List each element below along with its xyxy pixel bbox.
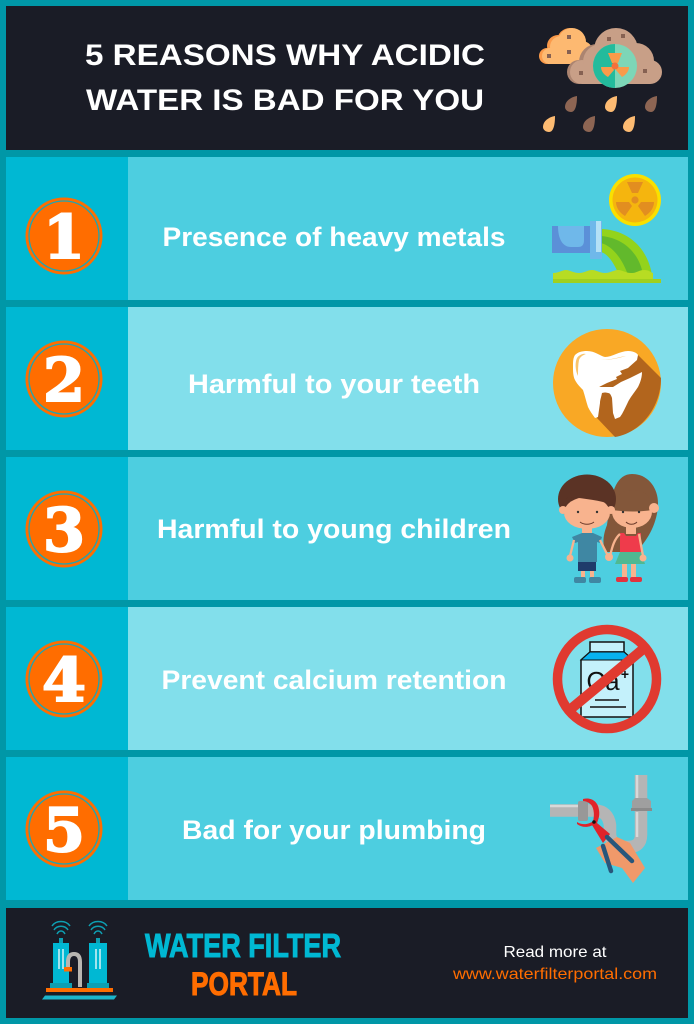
panel: footer xyxy=(6,908,688,1018)
icon: wrench on pipe xyxy=(550,775,652,883)
panel: reason 3 xyxy=(6,457,688,600)
read more text xyxy=(452,944,657,983)
number badge 2 xyxy=(26,340,102,418)
title: WATER IS BAD FOR YOU xyxy=(86,84,484,117)
number badge 1: 1 xyxy=(43,203,85,273)
number badge 3: 3 xyxy=(43,496,85,566)
read more text: Read more at xyxy=(504,944,607,961)
number badge 5 xyxy=(26,790,102,868)
panel: reason 4 xyxy=(6,607,688,750)
read more text: www.waterfilterportal.com xyxy=(452,966,657,983)
logo wordmark: PORTAL xyxy=(191,966,297,1002)
number badge 3 xyxy=(26,490,102,568)
title: 5 REASONS WHY ACIDIC xyxy=(85,39,485,72)
number badge 5: 5 xyxy=(43,796,85,866)
label 4: Prevent calcium retention xyxy=(162,665,506,695)
icon: no calcium prohibition sign: Ca xyxy=(586,666,620,696)
logo icon: water filter tanks xyxy=(42,922,117,1000)
panel: reason 5 xyxy=(6,757,688,900)
title xyxy=(85,39,485,117)
panel: reason 2 xyxy=(6,307,688,450)
panel: reason 1 xyxy=(6,157,688,300)
icon: cracked tooth xyxy=(553,329,661,437)
panel: header xyxy=(6,6,688,150)
icon: no calcium prohibition sign xyxy=(558,630,656,728)
logo wordmark xyxy=(145,927,341,1002)
label 3: Harmful to young children xyxy=(157,514,511,544)
number badge 4: 4 xyxy=(42,646,86,716)
label 2: Harmful to your teeth xyxy=(188,369,480,399)
logo wordmark: WATER FILTER xyxy=(145,927,341,964)
label 1: Presence of heavy metals xyxy=(162,222,506,252)
label 5: Bad for your plumbing xyxy=(182,815,486,845)
icon: radioactive waste pipe xyxy=(552,174,661,283)
icon: no calcium prohibition sign: + xyxy=(621,666,629,682)
number badge 4 xyxy=(26,640,102,718)
number badge 2: 2 xyxy=(43,346,85,416)
icon: radioactive clouds and rain xyxy=(539,28,662,132)
number badge 1 xyxy=(26,198,102,274)
icon: two children holding hands xyxy=(558,474,659,583)
